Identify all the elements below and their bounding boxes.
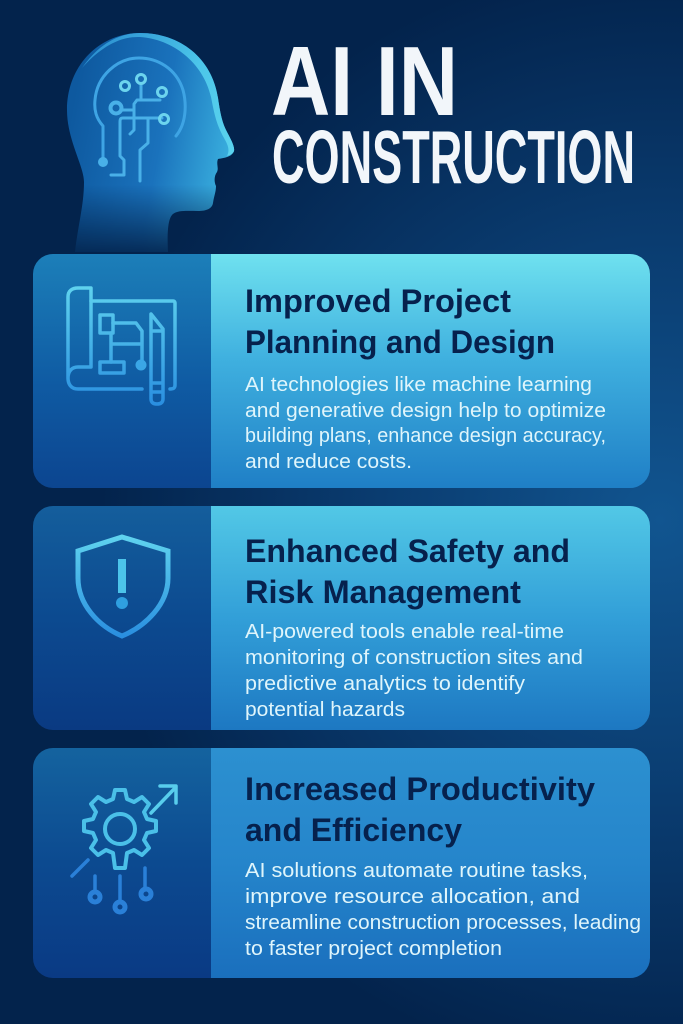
panel: improved project planning and design (33, 254, 650, 488)
body text (245, 374, 606, 473)
body text: AI-powered tools enable real-time (245, 621, 564, 643)
panel: increased productivity and efficiency: and Efficiency (245, 812, 462, 848)
panel: enhanced safety and risk management (33, 506, 650, 730)
panel: improved project planning and design: Planning and Design (245, 324, 555, 360)
body text: streamline construction processes, leading (245, 912, 641, 934)
body text: AI technologies like machine learning (245, 374, 592, 396)
brain circuit (95, 58, 185, 181)
body text: and reduce costs. (245, 451, 412, 473)
body text: building plans, enhance design accuracy, (245, 425, 606, 447)
body text: monitoring of construction sites and (245, 647, 583, 669)
heading: Increased Productivity (245, 771, 595, 807)
title: AI IN (271, 26, 458, 136)
body text: improve resource allocation, and (245, 886, 580, 908)
body text: potential hazards (245, 699, 405, 721)
icon: AI head with circuit brain (67, 33, 234, 252)
body text (245, 860, 641, 960)
body text (245, 621, 583, 721)
body text: AI solutions automate routine tasks, (245, 860, 588, 882)
body text: predictive analytics to identify (245, 673, 525, 695)
title (271, 26, 635, 199)
body text: and generative design help to optimize (245, 400, 606, 422)
panel: increased productivity and efficiency (33, 748, 650, 978)
icon: blueprint and pencil (68, 288, 175, 404)
icon: gear with arrow and circuit nodes (72, 786, 176, 912)
icon: shield with exclamation (78, 537, 168, 636)
panel: enhanced safety and risk management: Risk Management (245, 574, 521, 610)
body text: to faster project completion (245, 938, 502, 960)
heading: Enhanced Safety and (245, 533, 570, 569)
heading: Improved Project (245, 283, 511, 319)
